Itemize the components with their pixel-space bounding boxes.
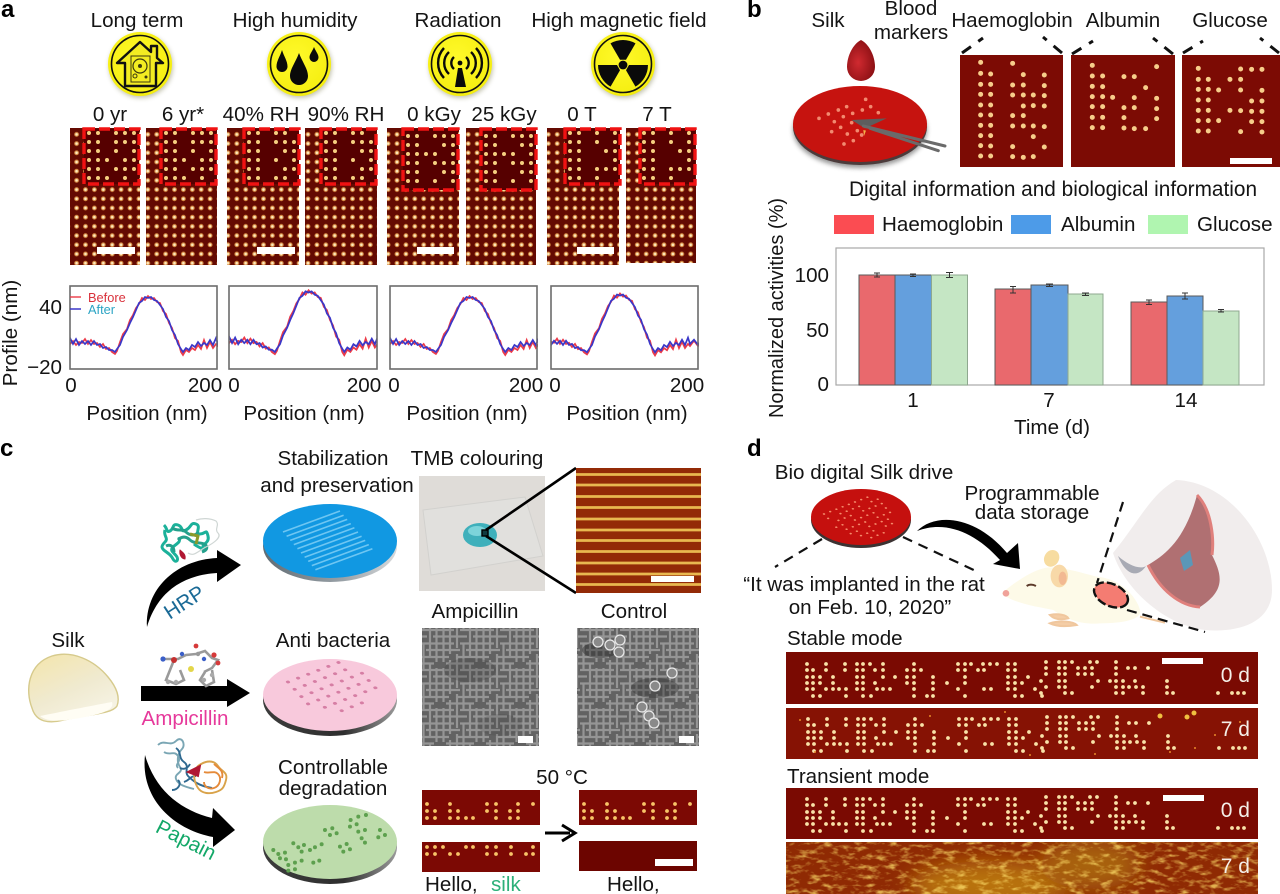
line chart: long term profile: Before [88, 290, 126, 305]
disc: controllable degradation [263, 756, 397, 884]
micrograph: glucose [1182, 55, 1280, 167]
strip: stable 0 d: 0 d [1221, 664, 1250, 687]
micrograph: 40% RH [227, 128, 299, 265]
condition sub-labels: 40% RH [223, 103, 299, 126]
line chart: long term profile: Position (nm) [86, 402, 208, 425]
micrograph: haemoglobin [960, 55, 1063, 167]
zoom lines [486, 468, 576, 593]
micrograph: 6 yr [146, 128, 217, 265]
panel a: stability under extreme conditions [0, 0, 712, 425]
disc: stabilization: and preservation [260, 474, 414, 497]
line chart: humidity profile: Position (nm) [243, 402, 365, 425]
stable mode strips [786, 627, 1258, 894]
SEM: ampicillin: Ampicillin [432, 600, 518, 623]
line chart: humidity profile: 200 [347, 374, 381, 397]
icon: blood drop [847, 40, 875, 81]
micrograph: 90% RH [305, 128, 377, 265]
headings: Silk [811, 9, 845, 32]
condition headings: High magnetic field [531, 9, 707, 32]
disc: stabilization: Stabilization [277, 447, 389, 470]
panel b: biological information [747, 0, 1280, 439]
error bars [874, 272, 1224, 312]
surgery photo [1113, 480, 1272, 630]
stable mode strips: Transient mode [787, 765, 929, 788]
legend: Haemoglobin [882, 213, 1003, 236]
condition sub-labels: 90% RH [308, 103, 384, 126]
bars for day 1 [859, 275, 968, 385]
strip: transient 7 d [786, 841, 1258, 894]
line chart: long term profile: After [88, 302, 116, 317]
arrow: ampicillin [141, 679, 250, 730]
micrograph: albumin [1071, 55, 1175, 167]
caption: Digital information and biological information [849, 178, 1257, 201]
headings: Haemoglobin [951, 9, 1073, 32]
quote [743, 573, 985, 619]
protein: papain [158, 739, 226, 793]
strip: transient 0 d [786, 788, 1258, 839]
legend: Albumin [1061, 213, 1135, 236]
condition sub-labels: 0 kGy [407, 103, 462, 126]
y ticks [795, 264, 829, 396]
micrograph: 0 yr [70, 128, 140, 265]
condition sub-labels: 7 T [642, 103, 672, 126]
bars for day 14 [1131, 296, 1239, 385]
silk disc with tweezers [793, 86, 945, 168]
disc: anti bacteria [263, 629, 397, 736]
bar chart: normalized activities [766, 198, 1264, 439]
condition headings: High humidity [233, 9, 358, 32]
silk cocoon: Silk [51, 629, 85, 652]
arrow: programmable storage: data storage [975, 501, 1089, 524]
quote: “It was implanted in the rat [743, 573, 985, 596]
stable mode strips: Stable mode [787, 627, 903, 650]
condition sub-labels: 6 yr* [162, 103, 204, 126]
y-axis ticks: −20 [27, 356, 62, 379]
icon: house with hard drive [108, 32, 173, 98]
icon: radioactive trefoil [591, 32, 656, 98]
axis title: normalized activities: Normalized activities (%) [766, 198, 788, 418]
y-axis ticks: 40 [39, 296, 62, 319]
condition headings [91, 9, 707, 32]
arrow: HRP: HRP [160, 581, 209, 624]
arrow: ampicillin: Ampicillin [142, 707, 228, 730]
line chart: humidity profile [228, 285, 380, 424]
silk cocoon [29, 629, 118, 722]
arrow: programmable storage: Programmable [964, 482, 1100, 505]
TMB colouring photo [411, 447, 545, 591]
x ticks: 14 [1175, 389, 1197, 412]
icon: radio waves [428, 32, 493, 98]
line chart: magnetic field profile [550, 285, 704, 424]
line chart: long term profile [66, 285, 222, 424]
condition sub-labels: 25 kGy [471, 103, 537, 126]
icon: water drops [267, 32, 332, 98]
y ticks: 50 [806, 319, 829, 342]
y-axis ticks [27, 296, 62, 379]
axis title: time: Time (d) [1014, 416, 1090, 439]
condition sub-labels [93, 103, 672, 126]
red silk disc [811, 489, 911, 548]
line chart: radiation profile: Position (nm) [406, 402, 528, 425]
strip: stable 7 d [786, 708, 1258, 759]
degradation strips [422, 766, 697, 894]
legend: Glucose [1197, 213, 1273, 236]
SEM: control with bacteria [577, 600, 699, 746]
headings: Glucose [1192, 9, 1268, 32]
x ticks [907, 389, 1197, 412]
micrograph: 7 T [626, 128, 696, 263]
panel label d: d [747, 435, 762, 462]
micrograph: 0 kGy [387, 128, 459, 265]
panel label c: c [0, 435, 13, 462]
line chart: humidity profile: 0 [228, 374, 240, 397]
y ticks: 100 [795, 264, 829, 287]
micrograph: 0 T [547, 128, 620, 265]
disc: controllable degradation: Controllable [278, 756, 388, 779]
strip: stable 0 d [786, 652, 1258, 704]
condition sub-labels: 0 yr [93, 103, 127, 126]
dashed zoom lines [962, 37, 1279, 54]
condition headings: Long term [91, 9, 183, 32]
panel c: functional silk [0, 435, 701, 894]
headings: markers [874, 21, 948, 44]
line chart: radiation profile: 200 [509, 374, 543, 397]
disc: stabilization [260, 447, 414, 582]
x ticks: 7 [1043, 389, 1055, 412]
condition headings: Radiation [414, 9, 502, 32]
panel d: implantable silk drive [743, 435, 1272, 894]
line chart: long term profile: 200 [188, 374, 222, 397]
arrow: papain [145, 755, 235, 865]
strip: stable 7 d: 7 d [1221, 718, 1250, 741]
strip: transient 0 d: 0 d [1221, 799, 1250, 822]
headings [811, 0, 1268, 44]
rat illustration [1002, 547, 1165, 626]
strip: transient 7 d: 7 d [1221, 855, 1250, 878]
dashed lines to photo [1097, 502, 1205, 632]
micrograph: 25 kGy [466, 128, 536, 265]
line chart: magnetic field profile: Position (nm) [566, 402, 688, 425]
protein: HRP [162, 519, 219, 561]
line chart: long term profile: 0 [65, 374, 77, 397]
arrow: HRP [147, 550, 241, 627]
quote: on Feb. 10, 2020” [789, 596, 951, 619]
disc: anti bacteria: Anti bacteria [276, 629, 391, 652]
SEM: control with bacteria: Control [601, 600, 667, 623]
line chart: radiation profile [389, 285, 542, 424]
y ticks: 0 [818, 373, 829, 396]
AFM stripes [576, 468, 701, 593]
TMB colouring photo: TMB colouring [411, 447, 543, 470]
heading: bio digital silk drive: Bio digital Silk drive [775, 461, 953, 484]
x ticks: 1 [907, 389, 919, 412]
headings: Albumin [1086, 9, 1160, 32]
arrow: papain: Papain [152, 815, 220, 865]
degradation strips: 50 °C [536, 766, 588, 789]
molecule: ampicillin [160, 644, 220, 686]
bars for day 7 [995, 285, 1103, 385]
chart frame [836, 248, 1264, 385]
line chart: magnetic field profile: 0 [549, 374, 561, 397]
legend [834, 213, 1273, 236]
condition sub-labels: 0 T [567, 103, 597, 126]
line chart: magnetic field profile: 200 [670, 374, 704, 397]
line chart: radiation profile: 0 [388, 374, 400, 397]
dashed callout lines [775, 537, 978, 572]
SEM: ampicillin [422, 600, 539, 746]
arrow: programmable storage [917, 482, 1100, 569]
disc: controllable degradation: degradation [279, 777, 387, 800]
implant site [1090, 577, 1132, 613]
